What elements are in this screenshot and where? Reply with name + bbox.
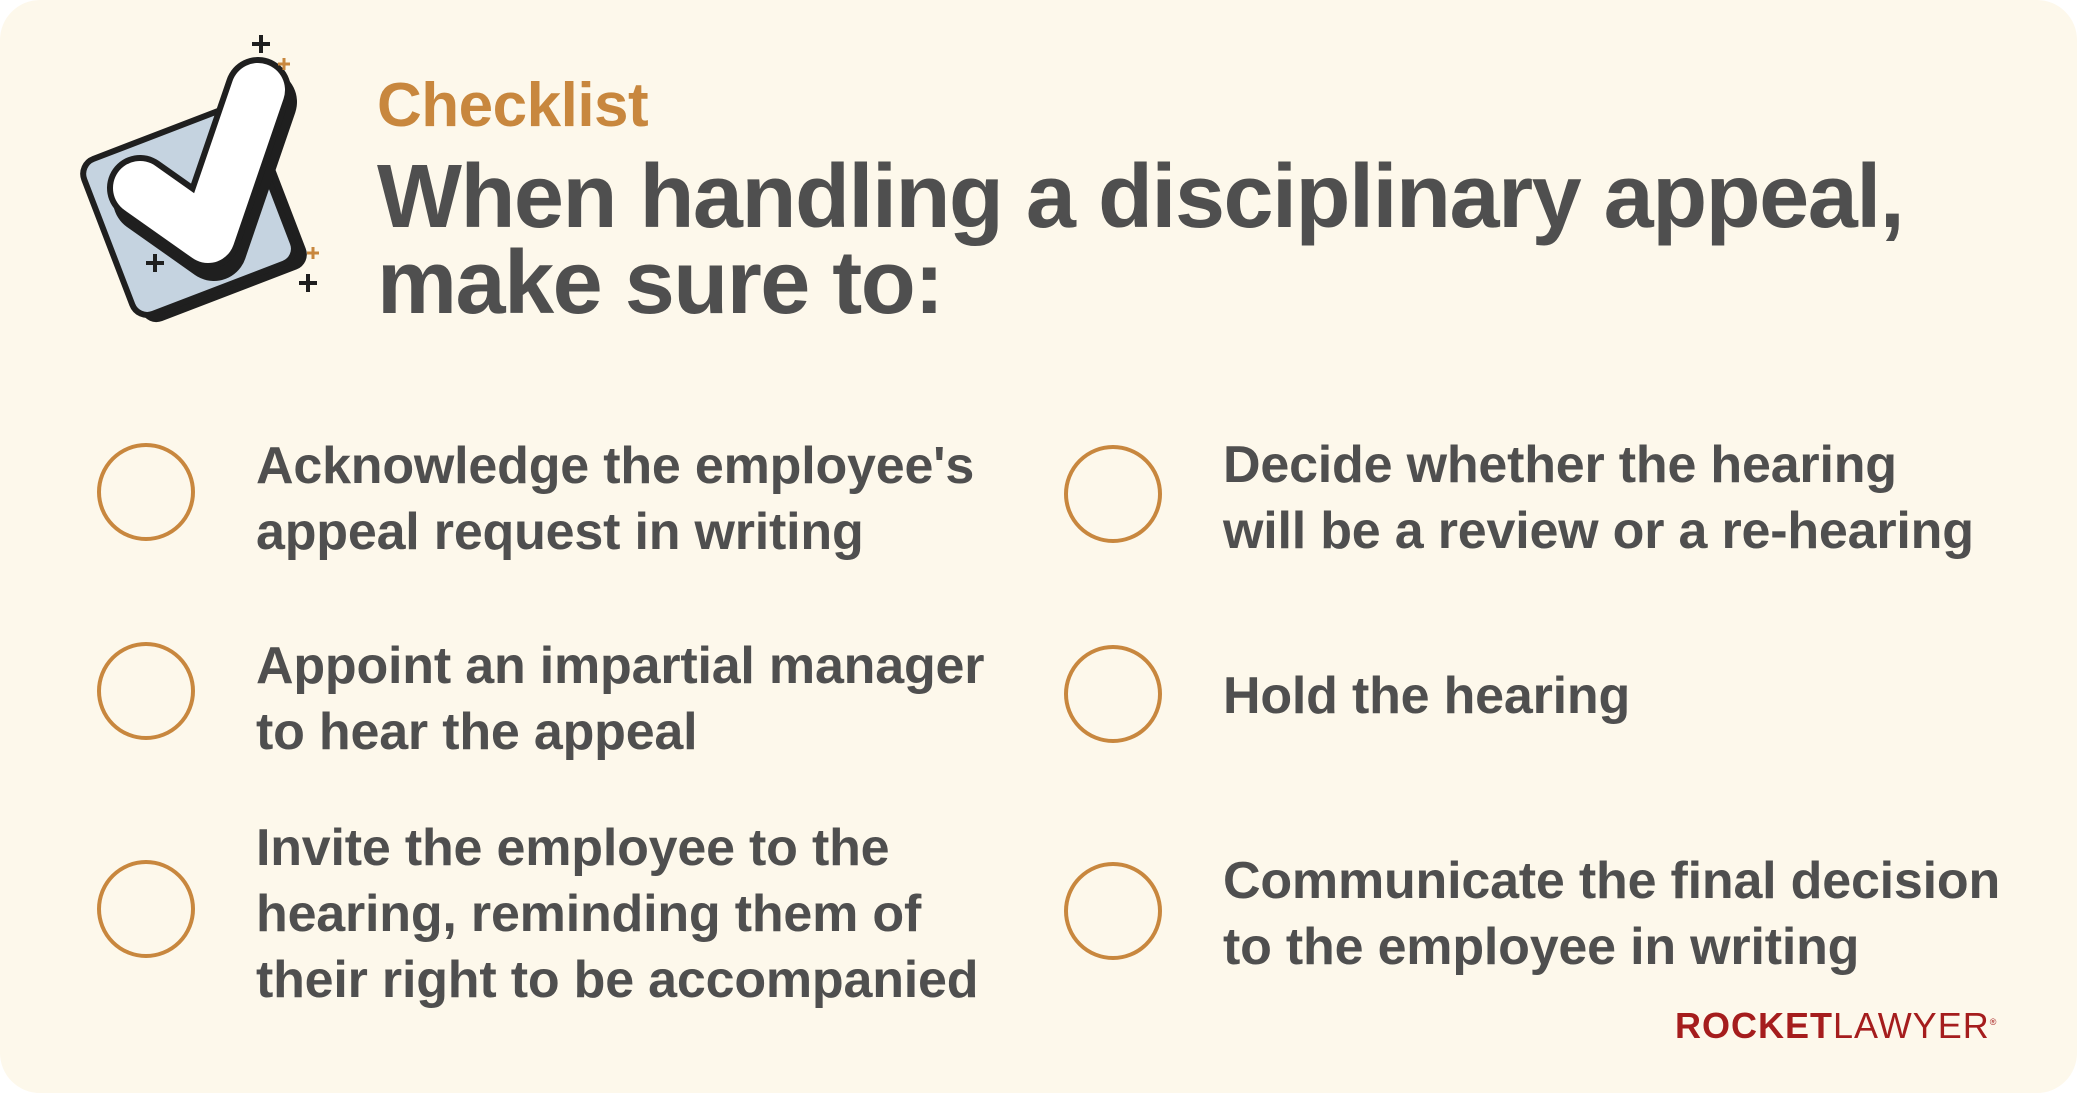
- item 4: will be a review or a re-hearing: [1223, 502, 1974, 560]
- text: Invite the employee to the: [256, 819, 889, 877]
- item 5: Hold the hearing: [1223, 667, 1630, 725]
- item 1: [97, 437, 974, 561]
- item 4: [1064, 436, 1974, 560]
- item 3: hearing, reminding them of: [256, 885, 921, 943]
- title: [377, 147, 1903, 333]
- title: When handling a disciplinary appeal,: [377, 147, 1903, 247]
- item 4: Decide whether the hearing: [1223, 436, 1897, 494]
- item 5: [1064, 645, 1630, 743]
- item 2: [97, 637, 984, 761]
- item 2: Appoint an impartial manager: [256, 637, 984, 695]
- subtitle: Checklist: Checklist: [377, 71, 648, 140]
- item 2: to hear the appeal: [256, 703, 697, 761]
- item 1: appeal request in writing: [256, 503, 864, 561]
- item 3: their right to be accompanied: [256, 951, 978, 1009]
- title: make sure to:: [377, 233, 943, 333]
- item 1: Acknowledge the employee's: [256, 437, 974, 495]
- item 6: to the employee in writing: [1223, 918, 1859, 976]
- item 6: [1064, 852, 2000, 976]
- logo: Rocket Lawyer: ROCKETLAWYER®: [1675, 1005, 1997, 1046]
- icon: checkbox with check mark: [80, 35, 319, 322]
- item 6: Communicate the final decision: [1223, 852, 2000, 910]
- item 3: [97, 819, 978, 1009]
